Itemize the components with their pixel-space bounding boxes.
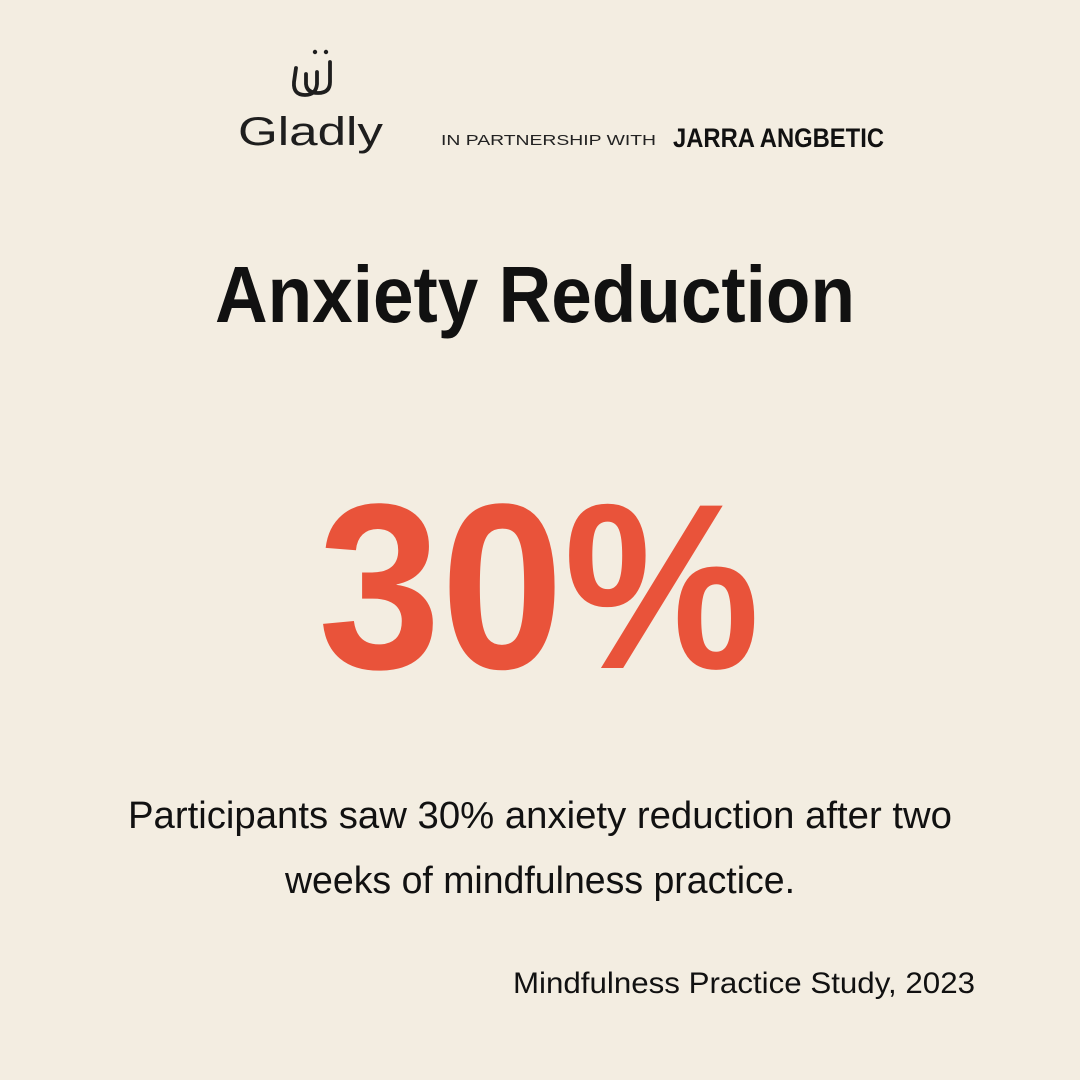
icon: Gladly mark xyxy=(294,50,330,95)
description text: weeks of mindfulness practice. xyxy=(284,860,795,902)
source citation: Mindfulness Practice Study, 2023 xyxy=(513,967,975,1000)
title: Anxiety Reduction xyxy=(215,250,855,339)
logo wordmark: Gladly xyxy=(238,110,383,154)
logo: Gladly xyxy=(238,50,383,154)
description text: Participants saw 30% anxiety reduction after two xyxy=(128,795,952,837)
partnership line: IN PARTNERSHIP WITH xyxy=(441,132,656,149)
partnership line xyxy=(441,123,884,153)
description text xyxy=(128,795,952,902)
partnership line: JARRA ANGBETIC xyxy=(673,123,884,153)
big stat: 30%: 30% xyxy=(318,455,760,719)
